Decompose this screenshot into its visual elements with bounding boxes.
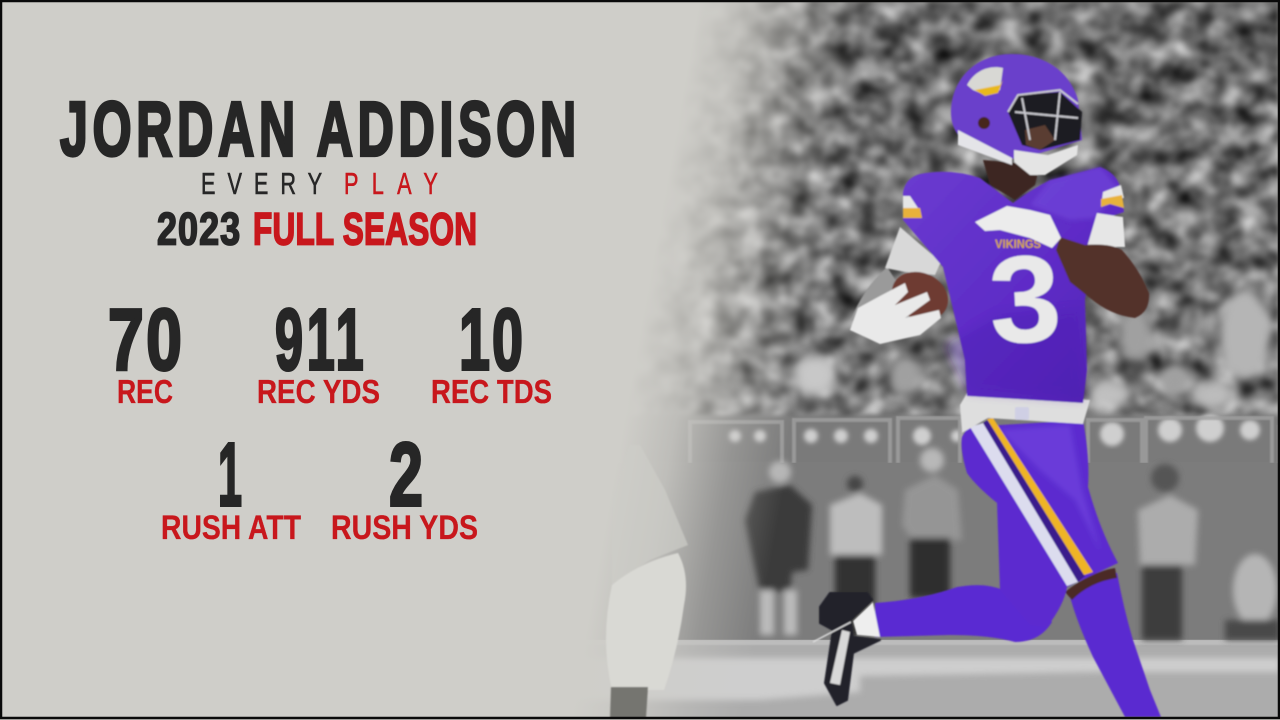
stat: receiving touchdowns — [431, 292, 552, 410]
stat: rush yards: RUSH YDS — [331, 509, 478, 547]
highlight on pants — [1000, 425, 1100, 550]
waistband undershirt — [960, 393, 1090, 433]
stadium photo background — [540, 0, 1280, 720]
jersey wordmark: VIKINGS — [995, 237, 1041, 251]
nfl shield — [1015, 407, 1029, 420]
cleat — [813, 593, 880, 705]
stat: rush attempts — [161, 426, 301, 547]
stat: rush attempts: RUSH ATT — [161, 509, 301, 547]
jersey number: 3 — [985, 229, 1065, 371]
stat: receptions: 70 — [108, 292, 182, 389]
front lower leg — [875, 585, 1052, 642]
right sleeve — [1087, 213, 1125, 247]
right arm — [1056, 237, 1149, 318]
back wall — [560, 463, 1280, 643]
white sock — [853, 602, 880, 637]
sideline staff — [745, 448, 1280, 640]
season line — [157, 204, 477, 255]
chin strap — [1014, 145, 1078, 175]
season line: FULL SEASON — [253, 205, 477, 255]
subtitle every play: PLAY — [344, 166, 438, 201]
subtitle every play: EVERY — [201, 166, 322, 201]
helmet — [951, 54, 1082, 165]
crowd — [560, 0, 1280, 425]
player name: JORDAN ADDISON — [60, 86, 576, 172]
subtitle every play — [201, 166, 438, 201]
season line: 2023 — [157, 204, 240, 254]
jersey — [903, 167, 1124, 403]
thigh and shorts — [962, 420, 1118, 627]
pant stripes — [970, 418, 1093, 586]
stat: rush yards — [331, 425, 478, 547]
player — [813, 54, 1161, 717]
left sleeve — [885, 227, 941, 275]
stat: receptions: REC — [117, 373, 173, 410]
knee skin — [1065, 568, 1117, 600]
stat: receiving yards: 911 — [275, 292, 364, 389]
stat: rush yards: 2 — [389, 425, 423, 525]
neck — [983, 160, 1040, 200]
rear leg — [1070, 573, 1161, 717]
title block — [60, 86, 576, 255]
stat: receiving yards: REC YDS — [257, 373, 380, 410]
stat: receiving yards — [257, 292, 380, 410]
upper glove — [975, 206, 1061, 248]
left forearm — [851, 267, 902, 328]
stat: rush attempts: 1 — [218, 426, 242, 526]
fence — [620, 414, 1280, 467]
ghosted opposing player — [606, 445, 688, 718]
stat: receiving touchdowns: 10 — [459, 292, 523, 389]
left fade overlay — [540, 0, 1280, 720]
field — [560, 640, 1280, 718]
football — [884, 263, 956, 329]
lower glove — [850, 283, 941, 344]
stat: receiving touchdowns: REC TDS — [431, 373, 552, 410]
